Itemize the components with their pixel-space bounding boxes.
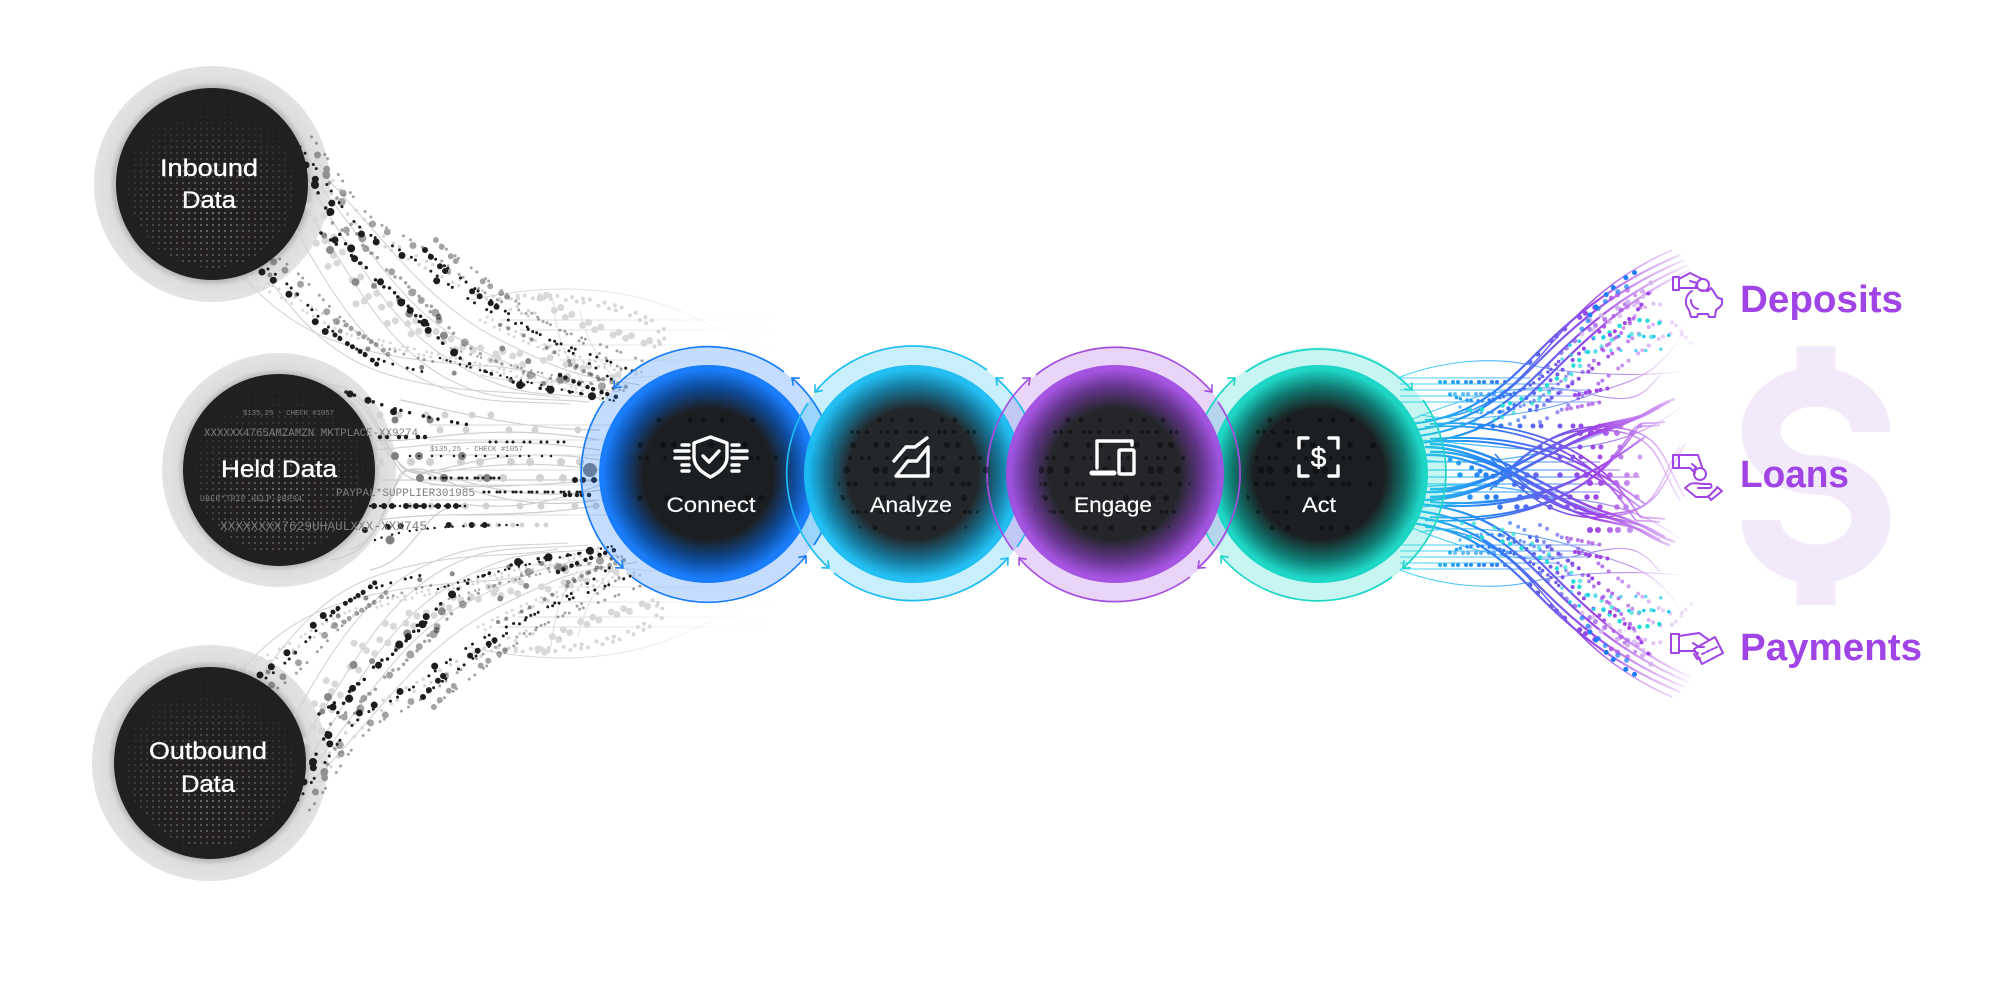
scattered teal and purple particles xyxy=(1462,284,1662,424)
arcs with arrowheads xyxy=(581,347,836,602)
arcs with arrowheads xyxy=(787,346,1040,601)
transaction strings: $135,25 - CHECK #1057 xyxy=(243,410,334,418)
icon: analyze chart xyxy=(894,438,928,476)
infographic canvas xyxy=(92,66,1920,881)
label: Loans: Loans xyxy=(1740,454,1849,496)
dot matrix texture xyxy=(195,404,363,550)
label: Payments: Payments xyxy=(1740,627,1922,669)
arcs with arrowheads xyxy=(987,347,1240,602)
particle stream: inbound data xyxy=(240,137,790,404)
icon: hand dropping coin into open hand xyxy=(1673,455,1722,500)
icon: shield with check xyxy=(675,437,747,477)
label: Deposits: Deposits xyxy=(1740,279,1903,321)
stream: deposits xyxy=(1400,250,1695,443)
transaction strings: PAYPAL*SUPPLIER301985 xyxy=(336,488,475,500)
stream: payments xyxy=(1400,504,1695,697)
label: Connect: Connect xyxy=(666,494,756,517)
stream: loans xyxy=(1420,399,1685,547)
label: Inbound Data: Data xyxy=(182,187,237,214)
step: engage xyxy=(987,347,1240,602)
data source: outbound xyxy=(114,667,306,859)
process rings: outer translucent discs xyxy=(581,347,1446,601)
dark data particles passing through the steps xyxy=(640,420,1390,528)
label: Held Data: Held Data xyxy=(221,456,338,483)
icon: large dollar sign xyxy=(1761,346,1871,605)
particle stream: outbound data xyxy=(238,543,788,810)
dot matrix texture xyxy=(128,698,292,844)
scattered colour particles xyxy=(1450,297,1695,424)
label: Act: Act xyxy=(1302,494,1336,517)
arcs with arrowheads xyxy=(1191,349,1446,601)
step: act xyxy=(1191,349,1446,601)
dot matrix texture xyxy=(128,116,292,268)
icon: devices xyxy=(1092,441,1134,474)
icon: hand dropping coin into piggy bank xyxy=(1673,273,1722,317)
transaction strings: $135,25 - CHECK #1057 xyxy=(430,446,523,454)
transaction strings xyxy=(200,410,523,534)
icon: hand holding payment card xyxy=(1671,633,1723,664)
data source: held xyxy=(183,374,375,566)
transaction strings: UBER*TRIP HELP-#BP94 xyxy=(200,495,302,504)
halo discs behind data sources xyxy=(92,66,396,881)
output streams to deposits, loans and payments xyxy=(1400,250,1695,697)
particle stream: held data xyxy=(330,385,780,570)
data source: inbound xyxy=(116,88,308,280)
scattered light particles xyxy=(250,151,667,400)
label: Outbound Data: Outbound xyxy=(149,738,267,765)
label: Outbound Data: Data xyxy=(181,771,236,798)
transaction strings: XXXXXXXX7629UHAULXXX-XXX745 xyxy=(220,519,427,534)
thickened crossing lines xyxy=(1430,399,1685,542)
label: Engage: Engage xyxy=(1074,494,1152,517)
scattered grey particles xyxy=(274,137,645,392)
label: Inbound Data: Inbound xyxy=(160,155,258,182)
icon: scan dollar xyxy=(1299,438,1338,476)
dollar glyph in icon: $ xyxy=(1311,442,1327,473)
label: Analyze: Analyze xyxy=(870,494,952,517)
step: connect xyxy=(581,347,836,602)
step: analyze xyxy=(787,346,1040,601)
transaction strings: XXXXXX4765AMZAMZN MKTPLACE-XX9274 xyxy=(204,428,418,440)
